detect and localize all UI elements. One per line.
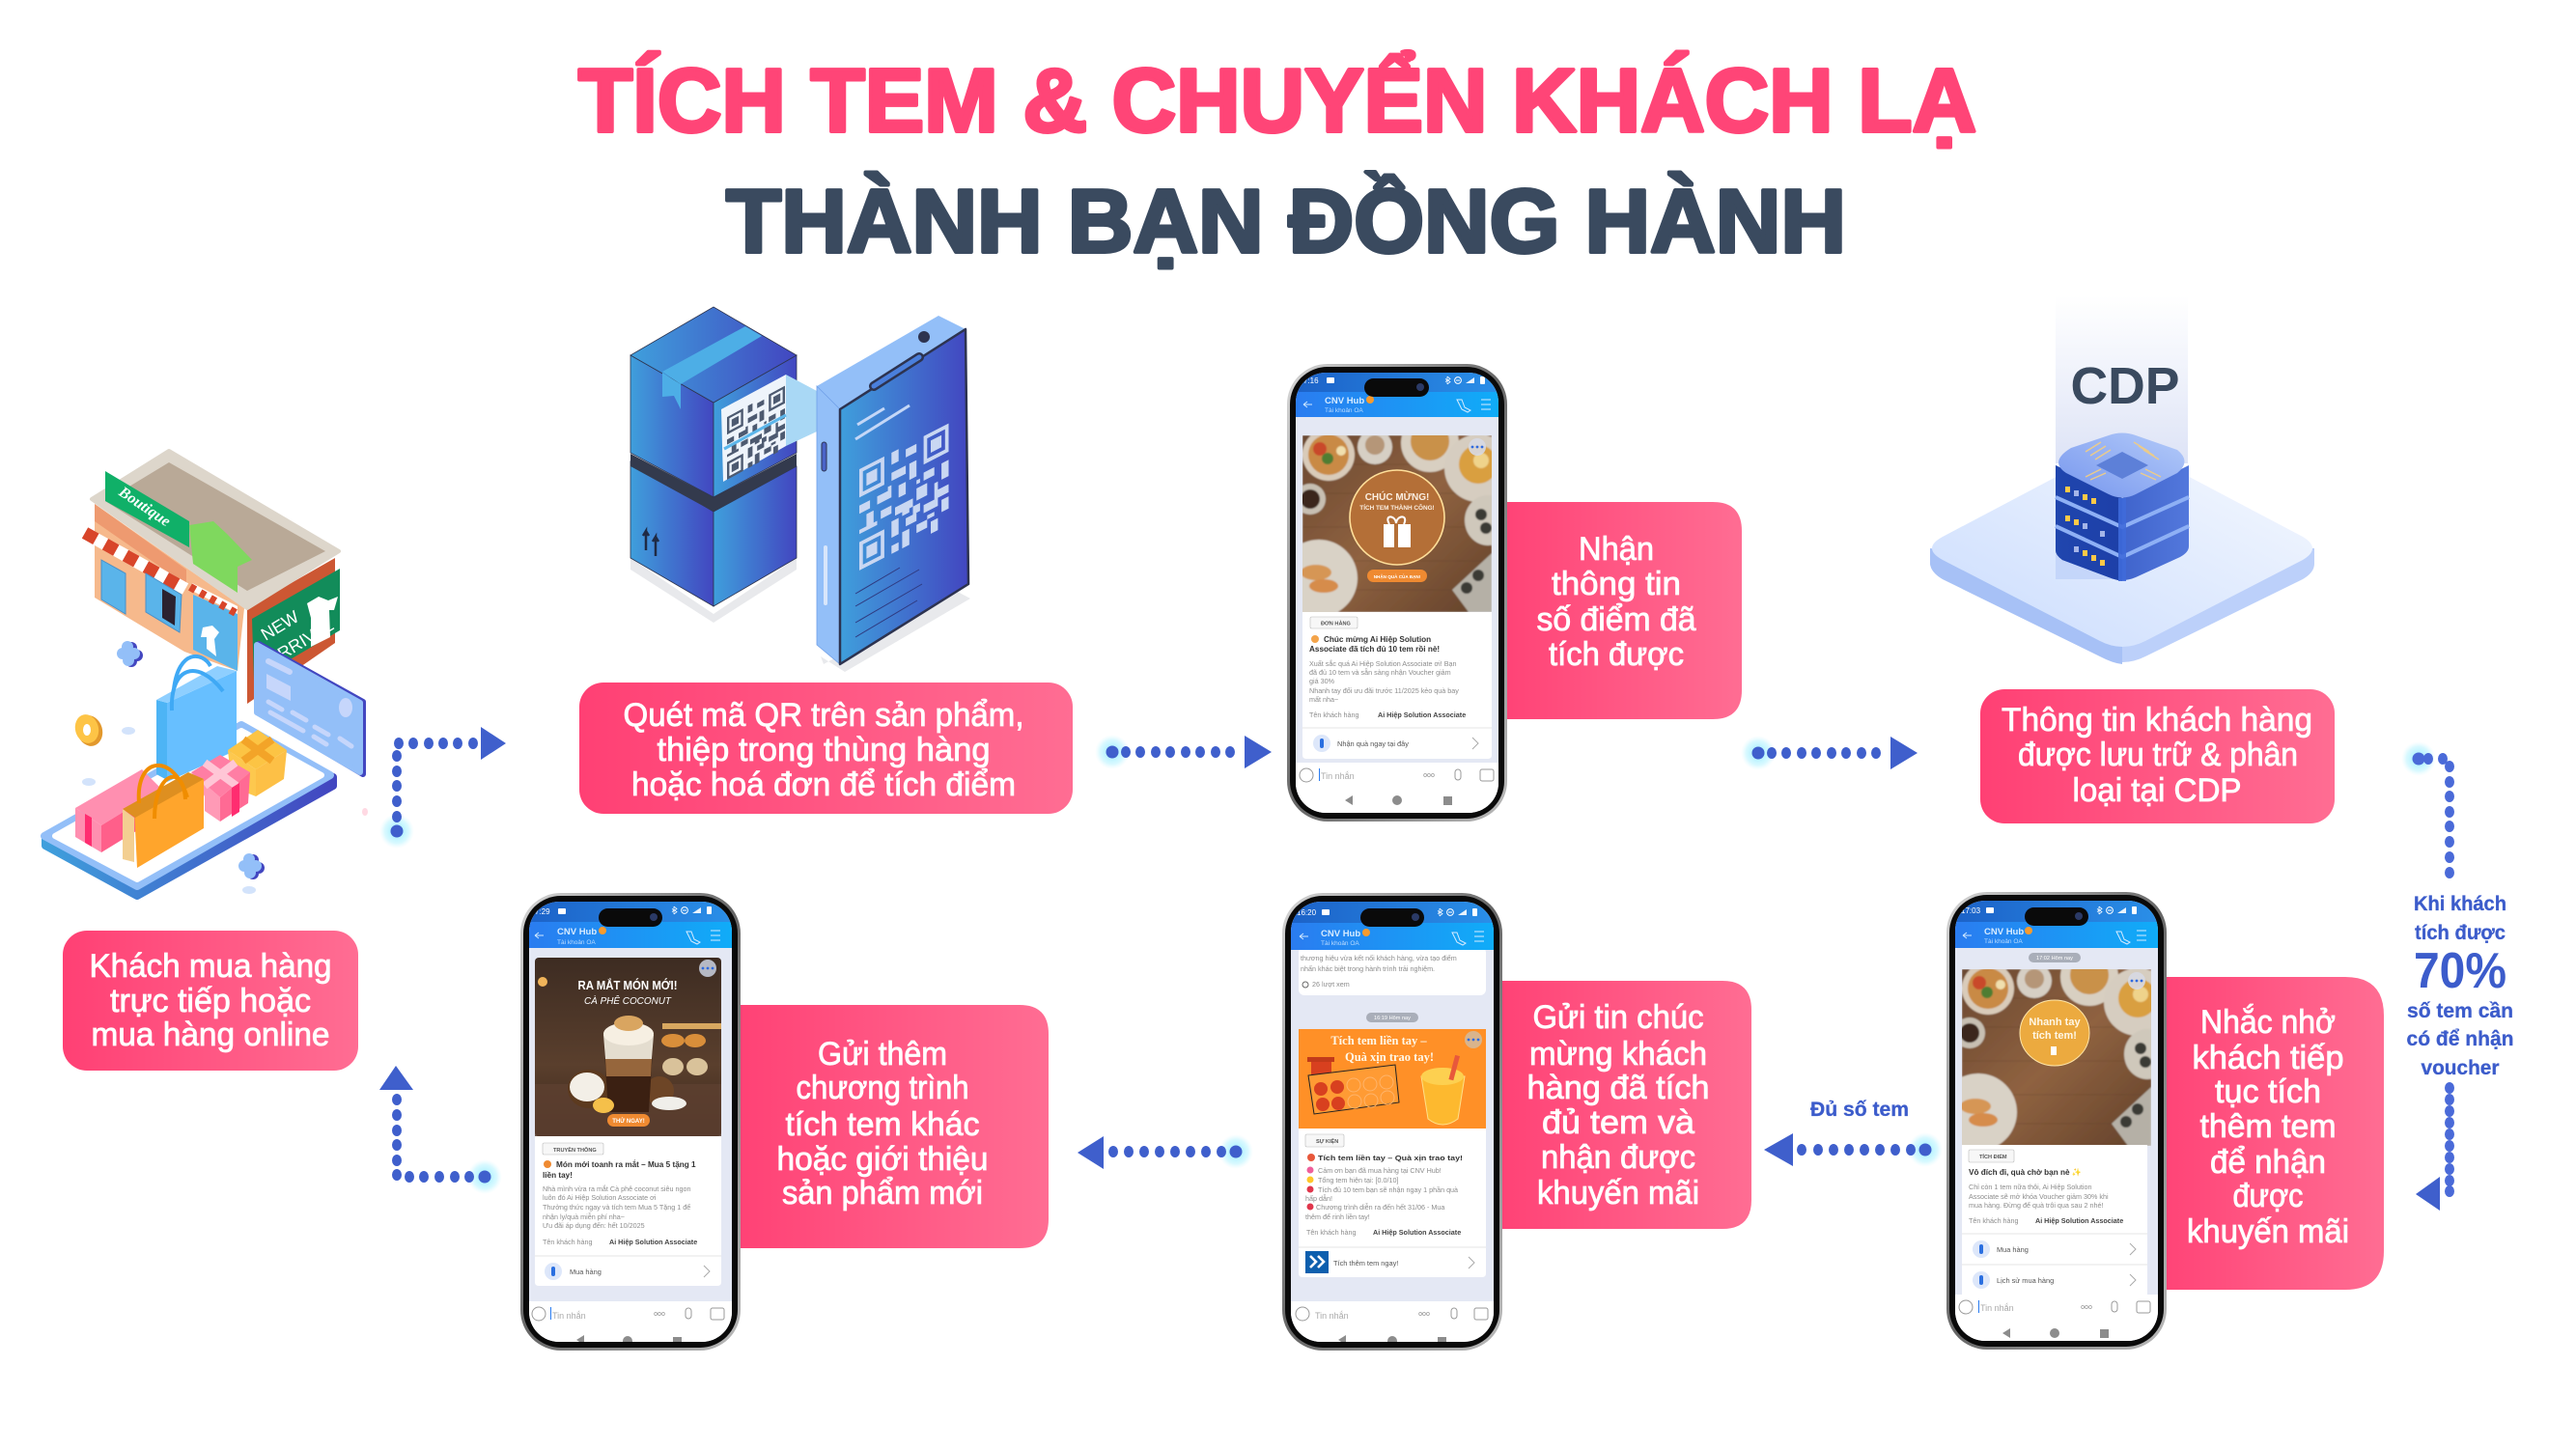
panel: reminder caption: thêm tem (2199, 1108, 2337, 1145)
panel: new program caption: sản phẩm mới (782, 1175, 983, 1212)
phone: points received message (1280, 364, 1512, 822)
phone: congratulations message: Tên khách hàng (1306, 1228, 1357, 1237)
phone: congratulations message: Cảm ơn bạn đã mua hàng tại CNV Hub! (1318, 1166, 1442, 1175)
panel: scan QR caption: Quét mã QR trên sản phẩm, (624, 697, 1023, 734)
panel: scan QR caption: thiệp trong thùng hàng (657, 732, 991, 768)
phone: new product message: ooo (654, 1311, 665, 1318)
phone: congratulations message: Tích thêm tem ngay! (1333, 1259, 1398, 1268)
panel: customer purchase caption: Khách mua hàng (89, 948, 332, 985)
phone: new product message: Tin nhắn (552, 1311, 586, 1321)
phone: reminder message: Tên khách hàng (1969, 1216, 2019, 1225)
phone: new product message: Ai Hiệp Solution Associate (609, 1238, 697, 1246)
phone: reminder message: ooo (2081, 1304, 2092, 1311)
phone: reminder message (1940, 892, 2171, 1350)
store building: ARRIVAL (265, 615, 337, 669)
panel: congratulation caption (1487, 981, 1751, 1229)
phone: points received message: Nhận quà ngay tại đây (1337, 739, 1409, 748)
callout: 70% stamps for voucher: tích được (2415, 922, 2506, 944)
phone: reminder message: 17:03 (1961, 906, 1981, 915)
phone: points received message: NHẬN QUÀ CỦA BẠN! (1374, 573, 1421, 579)
phone: points received message: Tin nhắn (1321, 771, 1355, 781)
panel: scan QR caption: hoặc hoá đơn để tích điểm (631, 766, 1016, 803)
phone: congratulations message: Tích đủ 10 tem bạn sẽ nhận ngay 1 phần quà (1318, 1185, 1458, 1194)
server stack (2056, 432, 2189, 581)
panel: congratulation caption: mừng khách (1529, 1036, 1707, 1073)
phone: congratulations message: nhấn khác biệt trong hành trình trải nghiệm. (1301, 964, 1435, 973)
phone: congratulations message: thêm để rinh liền tay! (1305, 1212, 1370, 1221)
panel: new program caption: Gửi thêm (818, 1036, 947, 1073)
phone: points received message: ooo (1423, 772, 1435, 779)
panel: congratulation caption: hàng đã tích (1527, 1070, 1709, 1106)
data beam (2056, 295, 2188, 463)
phone: new product message: 7:29 (535, 907, 550, 916)
box (630, 307, 797, 623)
phone with QR (817, 316, 970, 672)
phone: reminder message: Mua hàng (1997, 1245, 2029, 1254)
panel: reminder caption: khuyến mãi (2187, 1213, 2349, 1250)
phone: congratulations message: Quà xịn trao tay! (1345, 1050, 1434, 1064)
phone: congratulations message: ooo (1418, 1311, 1430, 1318)
gifts and orange bag (75, 730, 287, 868)
callout: 70% stamps for voucher: 70% (2414, 943, 2506, 999)
CDP label: CDP (2070, 357, 2180, 415)
phone: congratulations message: thương hiệu vừa kết nối khách hàng, vừa tạo điểm (1301, 954, 1457, 962)
phone: points received message: Chúc mừng Ai Hiệp Solution (1324, 635, 1431, 644)
panel: CDP storage caption: được lưu trữ & phân (2018, 737, 2298, 773)
phone: new product message: Mua hàng (570, 1268, 602, 1276)
panel: CDP storage caption: Thông tin khách hàng (2002, 702, 2312, 738)
phone: new product message: Ưu đãi áp dụng đến: hết 10/2025 (543, 1221, 645, 1230)
icon: shopping bag blue (156, 656, 237, 782)
panel: congratulation caption: đủ tem và (1542, 1104, 1694, 1141)
icon: payment card (257, 644, 363, 774)
callout: 70% stamps for voucher: số tem cần (2407, 1000, 2513, 1022)
panel: congratulation caption: nhận được (1541, 1139, 1695, 1176)
panel: reminder caption: được (2232, 1178, 2304, 1214)
store building: Boutique (115, 484, 173, 530)
phone: new product message: THỬ NGAY! (612, 1118, 645, 1125)
phone: reminder message: tích tem! (2032, 1030, 2077, 1042)
panel: customer purchase caption: mua hàng online (91, 1017, 330, 1053)
panel: receive points caption: thông tin (1552, 566, 1681, 602)
title (578, 50, 1976, 271)
platform (1930, 449, 2314, 664)
panel: reminder caption: để nhận (2210, 1144, 2326, 1181)
panel: reminder caption (2143, 977, 2384, 1290)
panel: scan QR caption (579, 683, 1073, 814)
panel: new program caption: chương trình (796, 1070, 969, 1106)
phone: points received message: CNV Hub (1325, 396, 1364, 406)
arrow: store to QR (379, 727, 506, 849)
phone: congratulations message: 16:19 Hôm nay (1374, 1016, 1411, 1021)
phone: congratulations message: 26 lượt xem (1312, 980, 1350, 989)
callout: 70% stamps for voucher: có để nhận (2406, 1028, 2514, 1050)
phone: reminder message: TÍCH ĐIỂM (1979, 1153, 2007, 1160)
panel: reminder caption: tục tích (2215, 1073, 2321, 1110)
phone: reminder message: Tài khoản OA (1984, 938, 2023, 945)
scan beam (786, 375, 817, 446)
phone: congratulations message: Tổng tem hiện tại: [0.0/10] (1318, 1176, 1399, 1184)
phone platform (44, 725, 333, 896)
phone: points received message: ĐƠN HÀNG (1321, 620, 1351, 627)
phone: congratulations message: 16:20 (1297, 908, 1317, 917)
panel: receive points caption (1487, 502, 1742, 719)
phone: new product message: Món mới toanh ra mắt – Mua 5 tặng 1 (556, 1158, 696, 1169)
phone: new product message: RA MẮT MÓN MỚI! (577, 978, 678, 992)
phone: reminder message: mua hàng. Đừng để quà trôi qua sau 2 nhé! (1969, 1201, 2103, 1210)
phone: reminder message: Lịch sử mua hàng (1997, 1276, 2054, 1285)
phone: points received message: Nhanh tay đổi ưu đãi trước 11/2025 kẻo quà bay (1309, 686, 1459, 695)
panel: receive points caption: tích được (1549, 636, 1684, 673)
phone: new product message: liền tay! (543, 1171, 573, 1180)
arrow: enough stamps to congratulation (1764, 1132, 1943, 1167)
panel: reminder caption: khách tiếp (2192, 1040, 2344, 1076)
phone: new product message: Tài khoản OA (557, 939, 596, 946)
phone: points received message: đã đủ 10 tem và sẵn sàng nhận Voucher giảm (1309, 668, 1451, 677)
phone: congratulations message: Chương trình diễn ra đến hết 31/06 - Mua (1316, 1203, 1444, 1212)
illustration: QR on box and phone (630, 307, 970, 672)
phone: reminder message: Tin nhắn (1980, 1303, 2014, 1313)
phone: reminder message: Nhanh tay (2029, 1017, 2081, 1028)
phone: new product message: Tên khách hàng (543, 1238, 593, 1246)
phone: congratulations message: Tin nhắn (1315, 1311, 1349, 1321)
arrow: phone to CDP (1741, 736, 1918, 770)
phone: congratulations message: Ai Hiệp Solution Associate (1373, 1228, 1461, 1237)
phone: new product message: luôn đó Ai Hiệp Solution Associate ơi (543, 1193, 657, 1202)
panel: customer purchase caption: trực tiếp hoặc (110, 983, 311, 1019)
callout: 70% stamps for voucher: Khi khách (2414, 893, 2506, 915)
phone: reminder message: CNV Hub (1984, 927, 2024, 937)
panel: reminder caption: Nhắc nhở (2200, 1004, 2336, 1041)
phone: congratulations message: Tích tem liền tay – (1330, 1034, 1427, 1047)
panel: receive points caption: số điểm đã (1537, 601, 1696, 638)
QR code on box (721, 375, 786, 482)
phone: reminder message: Chỉ còn 1 tem nữa thôi, Ai Hiệp Solution (1969, 1183, 2091, 1191)
phone: new product message: Thưởng thức ngay và tích tem Mua 5 Tặng 1 để (543, 1203, 690, 1212)
arrow: new program back to customer (379, 1066, 502, 1194)
panel: new program caption: tích tem khác (786, 1106, 979, 1143)
phone: points received message: Tài khoản OA (1325, 407, 1363, 414)
phone: congratulations message: CNV Hub (1321, 929, 1360, 939)
phone: reminder message: Associate sẽ mở khóa Voucher giảm 30% khi (1969, 1192, 2109, 1201)
panel: CDP storage caption: loại tại CDP (2072, 772, 2242, 809)
phone: congratulations message: Tích tem liền tay – Quà xịn trao tay! (1318, 1154, 1463, 1162)
phone: congratulations message: Tài khoản OA (1321, 940, 1359, 947)
panel: congratulation caption: Gửi tin chúc (1533, 999, 1703, 1036)
arrow: congratulation to new program (1078, 1134, 1253, 1169)
phone: new product message: Nhà mình vừa ra mắt Cà phê coconut siêu ngon (543, 1184, 690, 1193)
phone: new product message: TRUYỀN THÔNG (553, 1146, 597, 1154)
phone: new product message (520, 893, 741, 1351)
arrow: QR to phone (1095, 735, 1272, 769)
phone: reminder message: Ai Hiệp Solution Associate (2035, 1216, 2123, 1225)
illustration: CDP server (1930, 295, 2314, 664)
callout: 70% stamps for voucher (2406, 893, 2514, 1079)
store building: NEW (258, 607, 302, 644)
phone: points received message: TÍCH TEM THÀNH CÔNG! (1359, 503, 1435, 512)
phone: points received message: Associate đã tích đủ 10 tem rồi nè! (1309, 645, 1440, 654)
arrow: CDP to reminder with dotted path (2401, 741, 2454, 1211)
phone: points received message: Ai Hiệp Solution Associate (1378, 711, 1466, 719)
panel: CDP storage caption (1980, 689, 2335, 823)
phone: new product message: CNV Hub (557, 927, 597, 937)
phone: points received message: Tên khách hàng (1309, 711, 1359, 719)
phone: points received message: mất nha~ (1309, 695, 1338, 704)
phone: reminder message: 17:02 Hôm nay (2036, 956, 2073, 961)
phone: points received message: Xuất sắc quá Ai Hiệp Solution Associate ơi! Bạn (1309, 659, 1457, 668)
phone: points received message: giá 30% (1309, 677, 1335, 685)
phone: new product message: CÀ PHÊ COCONUT (584, 994, 672, 1007)
store building (85, 451, 340, 704)
phone: reminder message: Vô đích đi, quà chờ bạn nè ✨ (1969, 1167, 2082, 1177)
phone: congratulations message (1282, 893, 1502, 1351)
illustration: storefront and online shopping (44, 451, 368, 896)
phone: points received message: 7:16 (1303, 376, 1319, 385)
label: enough stamps: Đủ số tem (1810, 1099, 1909, 1121)
panel: receive points caption: Nhận (1579, 531, 1654, 568)
phone: new product message: nhận ly/quà miễn phí nha~ (543, 1212, 625, 1221)
title: THÀNH BẠN ĐỒNG HÀNH (726, 171, 1846, 271)
panel: congratulation caption: khuyến mãi (1537, 1175, 1699, 1212)
phone: congratulations message: SỰ KIỆN (1316, 1137, 1338, 1145)
panel: new program caption: hoặc giới thiệu (776, 1141, 989, 1178)
panel: new program caption (724, 1005, 1049, 1248)
decorative tokens (72, 641, 368, 894)
phone: congratulations message: hấp dẫn! (1305, 1194, 1332, 1203)
callout: 70% stamps for voucher: voucher (2422, 1057, 2499, 1079)
phone: points received message: CHÚC MỪNG! (1365, 490, 1429, 503)
title: TÍCH TEM & CHUYỂN KHÁCH LẠ (578, 50, 1976, 151)
panel: customer purchase caption (63, 931, 358, 1071)
